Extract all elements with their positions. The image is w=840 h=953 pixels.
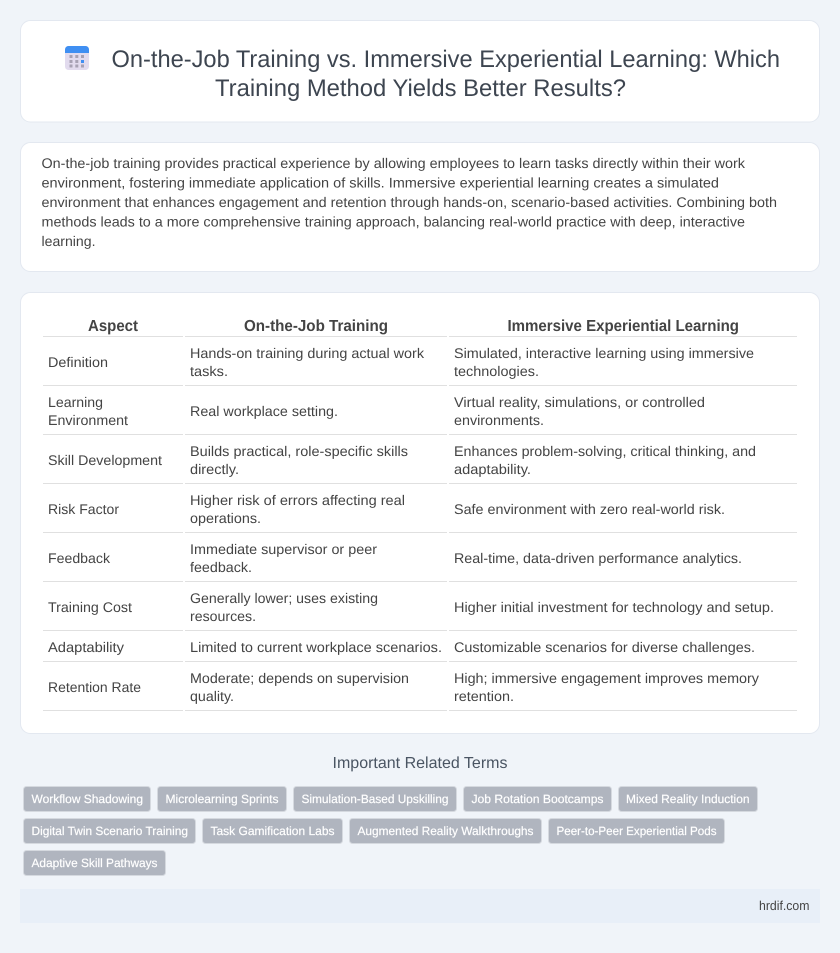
row: training cost: Higher initial investment for technology and setup. (454, 599, 774, 615)
tag: peer-to-peer experiential pods (548, 818, 724, 844)
row: retention rate (43, 670, 797, 710)
row: adaptability: Adaptability (48, 639, 124, 655)
panel: introduction (20, 142, 820, 272)
table header row (43, 318, 797, 336)
row: training cost (43, 590, 797, 630)
panel: header (20, 20, 820, 122)
row: skill development: Skill Development (48, 452, 162, 468)
row: learning environment: environments. (454, 412, 544, 428)
row: skill development: Enhances problem-solving, critical thinking, and (454, 443, 756, 459)
row: skill development: directly. (190, 461, 239, 477)
row: feedback: feedback. (190, 559, 252, 575)
row: learning environment: Virtual reality, simulations, or controlled (454, 394, 705, 410)
row: learning environment: Environment (48, 412, 128, 428)
row: retention rate: quality. (190, 688, 234, 704)
row: adaptability: Customizable scenarios for diverse challenges. (454, 639, 755, 655)
row: feedback: Feedback (48, 550, 111, 566)
row: adaptability: Limited to current workplace scenarios. (190, 639, 442, 655)
row: definition: technologies. (454, 363, 539, 379)
tag: adaptive skill pathways (24, 850, 166, 876)
tag: peer-to-peer experiential pods: Peer-to-Peer Experiential Pods (556, 824, 716, 838)
tag: task gamification labs: Task Gamification Labs (210, 824, 334, 838)
tag: microlearning sprints (158, 786, 286, 812)
tag: digital twin scenario training: Digital Twin Scenario Training (32, 824, 188, 838)
tag: microlearning sprints: Microlearning Sprints (166, 792, 278, 806)
row: retention rate: retention. (454, 688, 514, 704)
intro paragraph: On-the-job training provides practical experience by allowing employees to learn tasks directly within their work (42, 155, 746, 171)
intro paragraph: methods leads to a more comprehensive training approach, balancing real-world practice with deep, interactive (42, 214, 745, 230)
row: skill development: adaptability. (454, 461, 531, 477)
row: risk factor (43, 492, 797, 532)
row: skill development (43, 443, 797, 484)
row: learning environment: Learning (48, 394, 103, 410)
intro paragraph (42, 155, 777, 249)
tag: adaptive skill pathways: Adaptive Skill Pathways (32, 856, 158, 870)
title: Training Method Yields Better Results? (215, 75, 626, 102)
row: risk factor: operations. (190, 510, 261, 526)
title: On-the-Job Training vs. Immersive Experiential Learning: Which (112, 46, 780, 73)
row: risk factor: Safe environment with zero real-world risk. (454, 501, 725, 517)
related terms tags (24, 786, 758, 876)
tag: workflow shadowing: Workflow Shadowing (32, 792, 143, 806)
row: feedback: Immediate supervisor or peer (190, 541, 377, 557)
row: training cost: Generally lower; uses existing (190, 590, 378, 606)
intro paragraph: learning. (42, 233, 96, 249)
row: learning environment (43, 394, 797, 434)
tag: mixed reality induction: Mixed Reality Induction (626, 792, 750, 806)
row: definition (43, 345, 797, 386)
row: training cost: Training Cost (48, 599, 132, 615)
tag: mixed reality induction (618, 786, 758, 812)
row: retention rate: High; immersive engagement improves memory (454, 670, 759, 686)
row: definition: Simulated, interactive learning using immersive (454, 345, 754, 361)
row: adaptability (43, 639, 797, 662)
footer source label: hrdif.com (759, 898, 810, 913)
footer bar (20, 889, 820, 923)
row: definition: Hands-on training during actual work (190, 345, 425, 361)
row: learning environment: Real workplace setting. (190, 403, 338, 419)
row: feedback (43, 541, 797, 582)
table header row: On-the-Job Training (244, 318, 388, 335)
row: skill development: Builds practical, role-specific skills (190, 443, 408, 459)
intro paragraph: environment, fostering immediate application of skills. Immersive experiential learning creates a simulated (42, 174, 719, 190)
tag: task gamification labs (202, 818, 342, 844)
tag: workflow shadowing (24, 786, 150, 812)
tag: augmented reality walkthroughs (350, 818, 542, 844)
heading: important related terms: Important Related Terms (332, 755, 508, 772)
tag: job rotation bootcamps (464, 786, 612, 812)
row: definition: tasks. (190, 363, 228, 379)
row: risk factor: Risk Factor (48, 501, 119, 517)
tag: augmented reality walkthroughs: Augmented Reality Walkthroughs (358, 824, 534, 838)
row: definition: Definition (48, 354, 108, 370)
tag: simulation-based upskilling (294, 786, 456, 812)
icon: calendar (65, 46, 89, 70)
intro paragraph: environment that enhances engagement and retention through hands-on, scenario-based activities. Combining both (42, 194, 777, 210)
tag: digital twin scenario training (24, 818, 196, 844)
tag: job rotation bootcamps: Job Rotation Bootcamps (472, 792, 604, 806)
panel: comparison table (20, 292, 820, 734)
row: feedback: Real-time, data-driven performance analytics. (454, 550, 742, 566)
table header row: Aspect (88, 318, 139, 335)
title (112, 46, 780, 102)
table header row: Immersive Experiential Learning (508, 318, 739, 335)
row: risk factor: Higher risk of errors affecting real (190, 492, 405, 508)
row: retention rate: Retention Rate (48, 679, 141, 695)
row: retention rate: Moderate; depends on supervision (190, 670, 409, 686)
row: training cost: resources. (190, 608, 256, 624)
tag: simulation-based upskilling: Simulation-Based Upskilling (302, 792, 448, 806)
